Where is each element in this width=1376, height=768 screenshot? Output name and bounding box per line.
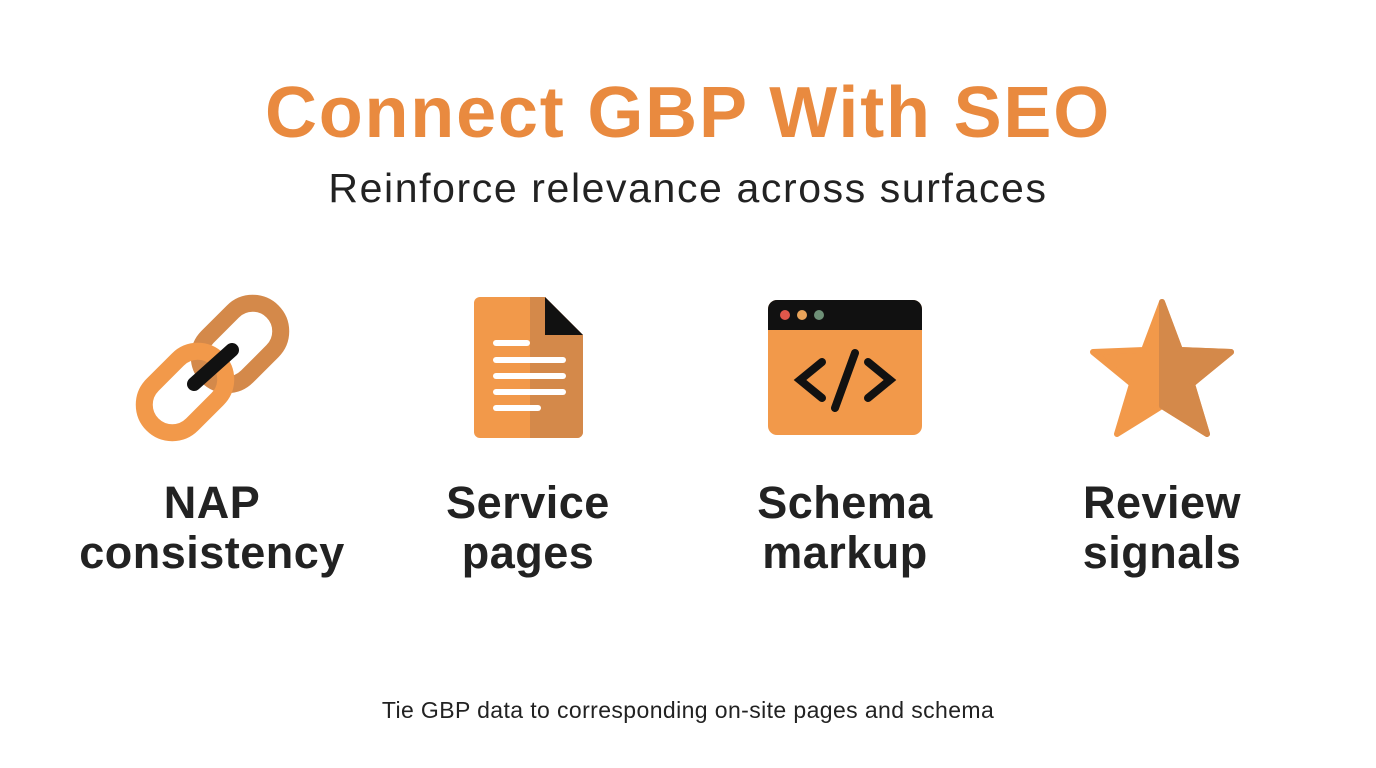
icon: star — [1093, 302, 1231, 434]
label: Review signals — [1083, 477, 1241, 578]
icon: document — [474, 297, 583, 438]
label: Schema markup: markup — [762, 527, 928, 578]
label: Schema markup: Schema — [757, 477, 933, 528]
title: Connect GBP With SEO — [265, 73, 1111, 153]
label: Review signals: Review — [1083, 477, 1241, 528]
label: Schema markup — [757, 477, 933, 578]
label: Service pages: pages — [462, 527, 594, 578]
footer note: Tie GBP data to corresponding on-site pages and schema — [382, 697, 994, 723]
label: Service pages: Service — [446, 477, 610, 528]
label: NAP consistency: consistency — [79, 527, 345, 578]
label: Service pages — [446, 477, 610, 578]
label: Review signals: signals — [1083, 527, 1241, 578]
subtitle: Reinforce relevance across surfaces — [328, 165, 1048, 211]
icon: chain link — [133, 292, 292, 444]
icon: code browser — [768, 300, 922, 435]
label: NAP consistency — [79, 477, 345, 578]
label: NAP consistency: NAP — [164, 477, 260, 528]
